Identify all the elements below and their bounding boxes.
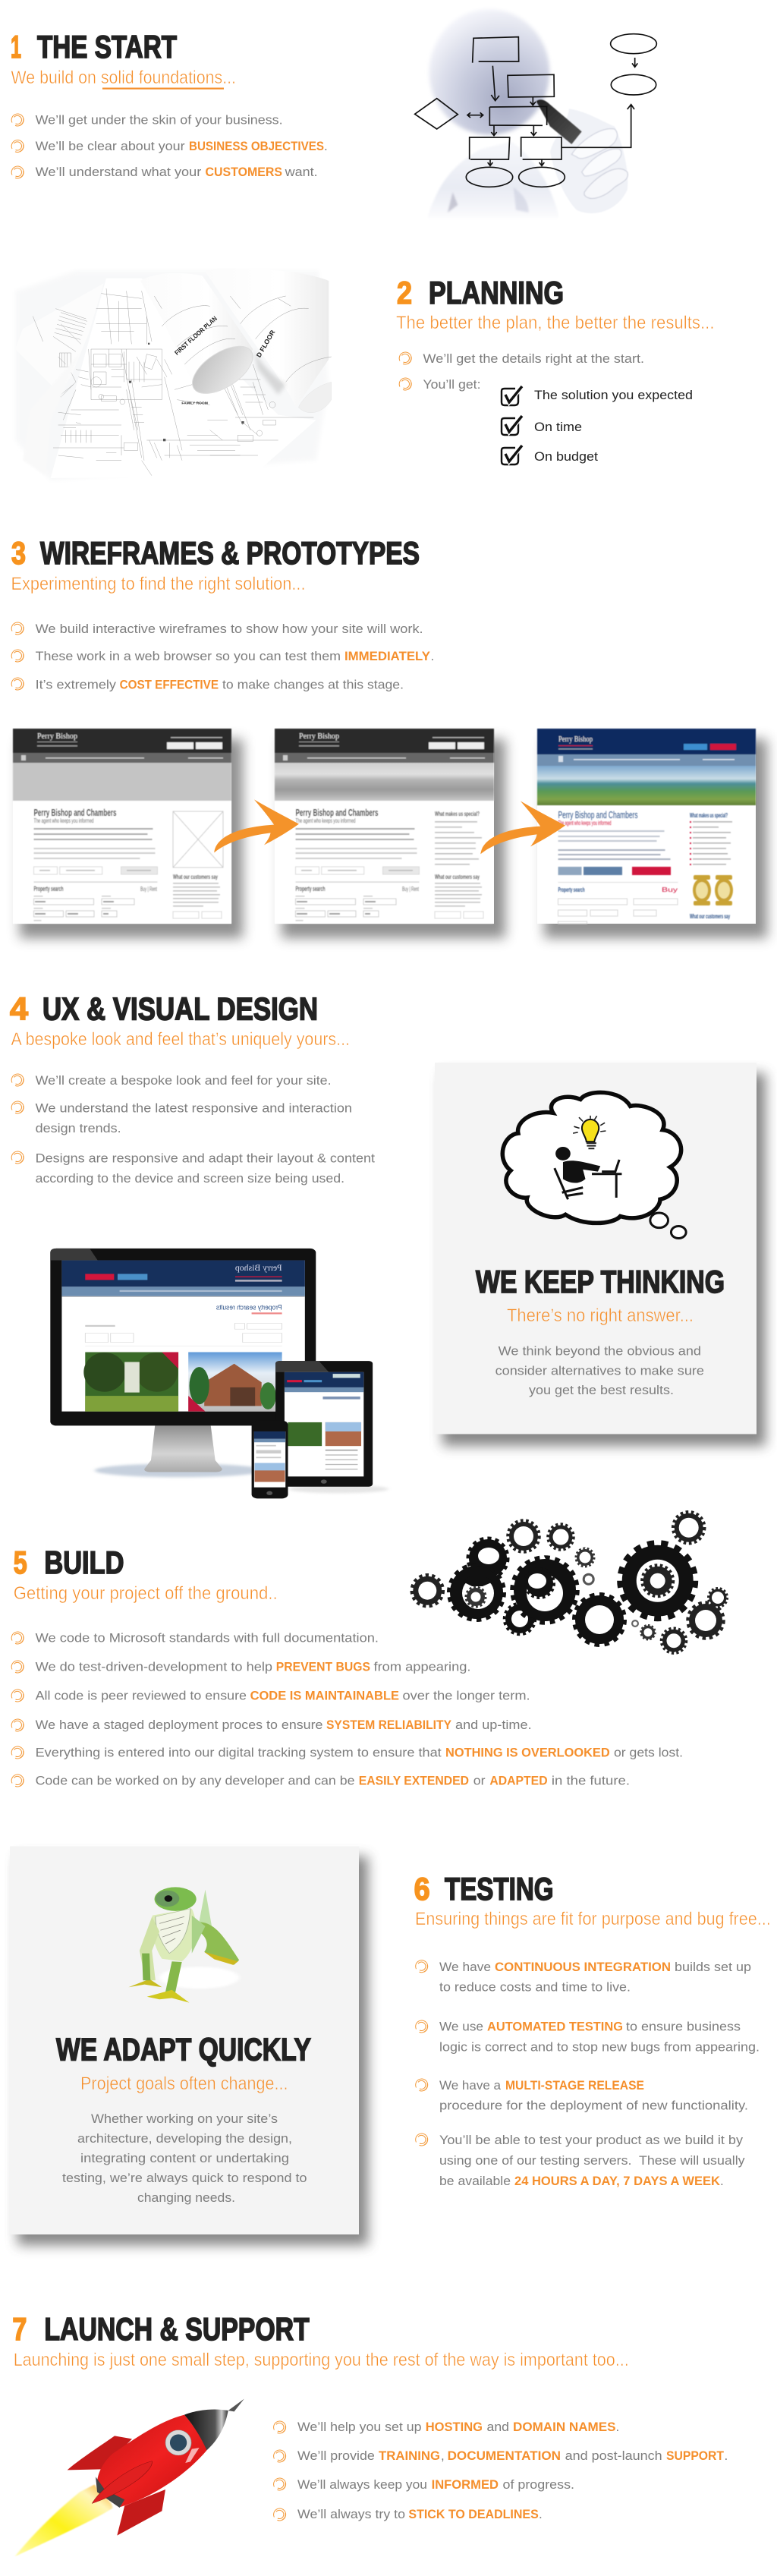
text block: builds set up [675, 1960, 751, 1974]
text line: and up-time. [455, 1718, 532, 1732]
text block: Designs are responsive and adapt their layout & content [36, 1151, 375, 1166]
arrow: wireframe to grey design [214, 799, 299, 852]
panel text: consider alternatives to make sure [495, 1363, 704, 1378]
heading: 2 planning: PLANNING [429, 275, 564, 310]
screen 3: full colour design: What makes us special? [690, 812, 728, 819]
text block: AUTOMATED TESTING [487, 2020, 623, 2034]
screen 1: wireframe: Buy | Rent [140, 886, 157, 893]
text line: SYSTEM RELIABILITY [326, 1718, 451, 1732]
bullet list [11, 112, 328, 179]
panel subtitle: Project goals often change... [80, 2074, 288, 2094]
screen 3: full colour design [537, 729, 767, 938]
text block: We use [439, 2020, 483, 2034]
text line: On time [534, 420, 582, 434]
screen 2: grey design: What makes us special? [435, 810, 480, 817]
text line: and post-launch [565, 2448, 662, 2463]
icon: swirl bullet [274, 2450, 286, 2462]
text line: from appearing. [373, 1659, 470, 1674]
image: rolled blueprints [15, 268, 332, 480]
heading: 2 planning: 2 [397, 275, 412, 310]
icon: swirl bullet [11, 622, 24, 635]
icon: swirl bullet [416, 1960, 428, 1973]
icon: swirl bullet [11, 140, 24, 152]
text line: We have a staged deployment proces to ensure [36, 1718, 322, 1732]
text line: We build interactive wireframes to show how your site will work. [36, 622, 423, 636]
heading: 3 wireframes and prototypes: 3 [11, 535, 26, 571]
text line: Everything is entered into our digital tracking system to ensure that [36, 1746, 442, 1759]
text line [36, 1659, 471, 1674]
heading: 1 the start [11, 29, 177, 65]
illustration: chameleon [128, 1887, 239, 2003]
text line [297, 2420, 619, 2434]
text line: IMMEDIATELY [344, 650, 430, 663]
panel text [495, 1343, 704, 1397]
text line: The solution you expected [534, 388, 693, 402]
screen 3: full colour design: Perry Bishop and Chambers [558, 809, 638, 820]
text line: . [724, 2448, 728, 2463]
text block: to reduce costs and time to live. [439, 1980, 631, 1995]
icon: swirl bullet [274, 2508, 286, 2521]
heading: 5 build: 5 [14, 1545, 27, 1580]
text block: . [720, 2174, 724, 2188]
screen 2: grey design [275, 729, 505, 938]
icon: swirl bullet [416, 2079, 428, 2091]
text line: DOCUMENTATION [448, 2449, 561, 2463]
image: rolled blueprints: FIRST FLOOR PLAN [173, 314, 219, 357]
text block: to ensure business [626, 2020, 741, 2034]
text line: STICK TO DEADLINES [408, 2508, 539, 2521]
text line: to make changes at this stage. [222, 677, 404, 692]
subtitle: The better the plan, the better the results... [396, 313, 715, 333]
text line: These work in a web browser so you can test them [36, 649, 341, 663]
image: rolled blueprints: D FLOOR [255, 328, 277, 359]
heading: 1 the start: THE START [37, 29, 177, 65]
screen 2: grey design: The agent who keeps you informed [296, 817, 355, 824]
image: rolled blueprints: FAMILY ROOM [181, 402, 208, 406]
panel text: you get the best results. [529, 1383, 674, 1397]
illustration: gears [412, 1512, 727, 1653]
icon: swirl bullet [274, 2478, 286, 2490]
text block: You’ll be able to test your product as we build it by [439, 2133, 744, 2147]
text line [297, 2477, 574, 2492]
text line: ADAPTED [489, 1775, 548, 1788]
text line: CUSTOMERS [205, 165, 282, 179]
screen 3: full colour design: What our customers say [690, 913, 730, 920]
text block: design trends. [36, 1121, 121, 1135]
text line: or [473, 1773, 486, 1788]
icon: swirl bullet [11, 1151, 24, 1164]
text line: We’ll help you set up [297, 2420, 422, 2434]
text line: DOMAIN NAMES [513, 2420, 616, 2434]
text line [36, 1773, 630, 1788]
illustration: responsive devices: Perry Bishop [235, 1263, 282, 1273]
bullet list [11, 622, 434, 692]
icon: swirl bullet [399, 352, 411, 364]
text line: All code is peer reviewed to ensure [36, 1688, 247, 1703]
text block [439, 2133, 745, 2188]
text block [36, 1151, 375, 1186]
heading: 6 testing: TESTING [445, 1871, 554, 1907]
icon: swirl bullet [274, 2421, 286, 2433]
text block: using one of our testing servers. These will usually [439, 2153, 745, 2168]
screen 3: full colour design: The agent who keeps you informed [558, 820, 612, 827]
screen 1: wireframe: Perry Bishop and Chambers [33, 808, 117, 818]
heading: 4 ux and visual design: 4 [10, 991, 29, 1026]
panel: we keep thinking [435, 1063, 766, 1446]
bullet list [399, 351, 644, 392]
text line: over the longer term. [402, 1688, 530, 1703]
section 1: the start [11, 9, 656, 218]
heading: 6 testing [414, 1871, 554, 1907]
screen 1: wireframe: Perry Bishop [37, 732, 77, 741]
text line: We’ll get under the skin of your business. [36, 112, 283, 128]
icon: swirl bullet [416, 2134, 428, 2146]
text line: We’ll get the details right at the start. [423, 351, 644, 366]
heading: 6 testing: 6 [414, 1871, 430, 1907]
screen 2: grey design: Perry Bishop [299, 732, 339, 741]
text line: INFORMED [432, 2478, 499, 2492]
text line: , [441, 2448, 445, 2463]
icon: swirl bullet [11, 1074, 24, 1086]
text line [36, 139, 328, 153]
heading: 7 launch and support: 7 [12, 2311, 27, 2347]
text line: TRAINING [379, 2449, 440, 2463]
panel text: architecture, developing the design, [77, 2131, 292, 2146]
panel text [62, 2112, 307, 2205]
illustration: figure drawing a flowchart [415, 9, 656, 218]
heading: 4 ux and visual design: UX & VISUAL DESIGN [42, 991, 318, 1026]
panel text: changing needs. [137, 2190, 235, 2205]
heading: 5 build: BUILD [44, 1545, 124, 1580]
screen 1: wireframe: The agent who keeps you informed [33, 817, 94, 824]
text line: Code can be worked on by any developer and can be [36, 1773, 354, 1788]
text block: according to the device and screen size being used. [36, 1171, 344, 1186]
icon: swirl bullet [11, 1775, 24, 1787]
text line: and [487, 2420, 509, 2434]
subtitle: Experimenting to find the right solution... [11, 574, 305, 594]
section 4: ux and visual design [10, 991, 766, 1498]
heading: 2 planning [397, 275, 564, 310]
text line [36, 1746, 683, 1759]
panel: we adapt quickly [10, 1846, 368, 2245]
subtitle: A bespoke look and feel that’s uniquely yours... [11, 1029, 350, 1050]
text block: be available [439, 2174, 511, 2188]
panel text: testing, we’re always quick to respond to [62, 2171, 307, 2185]
text line: COST EFFECTIVE [120, 679, 219, 692]
text line [36, 677, 404, 692]
icon: swirl bullet [11, 114, 24, 126]
text line: want. [285, 165, 318, 179]
text block: We have a [439, 2078, 502, 2093]
text block [439, 2078, 748, 2113]
text line: or gets lost. [614, 1746, 683, 1759]
text line: We’ll create a bespoke look and feel for your site. [36, 1073, 332, 1088]
icon: swirl bullet [11, 1746, 24, 1759]
subtitle: Launching is just one small step, supporting you the rest of the way is important too... [14, 2350, 629, 2370]
section 2: planning [15, 268, 714, 480]
panel subtitle: There’s no right answer... [507, 1305, 694, 1326]
screen 3: full colour design: Perry Bishop [558, 735, 593, 744]
text line: . [324, 139, 328, 153]
text line: On budget [534, 449, 598, 464]
icon: swirl bullet [399, 378, 411, 390]
illustration: responsive devices: Property search results [216, 1304, 282, 1312]
screen 1: wireframe: What our customers say [173, 873, 218, 880]
screen 2: grey design: Buy | Rent [402, 886, 419, 893]
panel text: We think beyond the obvious and [499, 1343, 701, 1359]
heading: 7 launch and support: LAUNCH & SUPPORT [44, 2311, 310, 2347]
icon: swirl bullet [11, 1661, 24, 1673]
illustration: responsive devices [50, 1249, 388, 1498]
text line [297, 2507, 543, 2521]
screen 3: full colour design: Buy [662, 886, 678, 893]
text block: We have [439, 1960, 491, 1974]
text line: We do test-driven-development to help [36, 1659, 272, 1674]
panel text: integrating content or undertaking [80, 2151, 289, 2165]
icon: swirl bullet [11, 1719, 24, 1731]
text line: It’s extremely [36, 677, 117, 692]
bullet list [11, 1630, 683, 1788]
subtitle: Getting your project off the ground.. [14, 1583, 278, 1604]
text block: MULTI-STAGE RELEASE [505, 2079, 644, 2093]
text line [297, 2448, 728, 2463]
section 5: build [11, 1512, 727, 1788]
panel heading: WE KEEP THINKING [476, 1264, 725, 1299]
section 7: launch and support [12, 2311, 728, 2556]
text block: We understand the latest responsive and interaction [36, 1101, 352, 1116]
screen 1: wireframe [13, 729, 243, 938]
screen 2: grey design: Perry Bishop and Chambers [296, 808, 379, 818]
icon: swirl bullet [11, 678, 24, 690]
illustration: rocket [15, 2399, 244, 2556]
text line: EASILY EXTENDED [359, 1775, 469, 1788]
text block: procedure for the deployment of new functionality. [439, 2099, 748, 2113]
text line: We’ll be clear about your [36, 139, 185, 153]
text block [439, 1960, 751, 1995]
panel text: Whether working on your site’s [91, 2112, 278, 2126]
text line [36, 1718, 532, 1732]
text line: We’ll always try to [297, 2507, 405, 2521]
text line: PREVENT BUGS [276, 1661, 370, 1674]
icon: checkbox [502, 416, 522, 435]
icon: swirl bullet [11, 1632, 24, 1644]
screen 2: grey design: Property search [296, 885, 325, 893]
text line: . [539, 2507, 543, 2521]
text line: NOTHING IS OVERLOOKED [445, 1746, 610, 1759]
text line: We code to Microsoft standards with full documentation. [36, 1630, 379, 1645]
text line: You’ll get: [423, 377, 481, 392]
subtitle: We build on solid foundations... [11, 68, 236, 88]
text block: logic is correct and to stop new bugs from appearing. [439, 2040, 760, 2054]
text line: of progress. [502, 2477, 574, 2492]
text line: . [616, 2420, 619, 2434]
icon: swirl bullet [11, 166, 24, 178]
heading: 3 wireframes and prototypes: WIREFRAMES & PROTOTYPES [40, 535, 420, 571]
section 6: testing [10, 1846, 771, 2245]
text line: We’ll always keep you [297, 2477, 427, 2492]
text block: 24 HOURS A DAY, 7 DAYS A WEEK [514, 2174, 720, 2188]
heading: 5 build [14, 1545, 124, 1580]
screen 3: full colour design: Property search [558, 886, 584, 893]
text line: in the future. [552, 1773, 630, 1788]
bullet list [416, 1960, 760, 2188]
screen 2: grey design: What our customers say [435, 873, 480, 880]
text line: We’ll provide [297, 2448, 375, 2463]
text block [36, 1101, 352, 1135]
arrow: grey design to colour design [480, 801, 565, 854]
icon: swirl bullet [11, 650, 24, 662]
text line: SUPPORT [666, 2449, 724, 2463]
screen 1: wireframe: Property search [33, 885, 64, 893]
text line [36, 1688, 530, 1703]
text line: We’ll understand what your [36, 165, 202, 179]
icon: swirl bullet [11, 1690, 24, 1702]
section 3: wireframes and prototypes [11, 535, 767, 938]
icon: thought cloud with person and light bulb [502, 1092, 686, 1239]
text block [439, 2020, 760, 2054]
icon: checkbox [502, 446, 522, 464]
checklist [502, 386, 693, 464]
text block: CONTINUOUS INTEGRATION [495, 1960, 671, 1974]
panel heading: WE ADAPT QUICKLY [56, 2032, 311, 2067]
text line: CODE IS MAINTAINABLE [250, 1690, 399, 1703]
text line: . [431, 649, 434, 663]
text line [36, 165, 318, 179]
bullet list [274, 2420, 728, 2521]
icon: swirl bullet [11, 1101, 24, 1113]
text line: HOSTING [426, 2420, 483, 2434]
icon: swirl bullet [416, 2020, 428, 2033]
icon: checkbox [502, 386, 522, 405]
bullet list [11, 1073, 375, 1186]
heading: 1 the start: 1 [11, 29, 21, 65]
text line: BUSINESS OBJECTIVES [189, 140, 324, 153]
